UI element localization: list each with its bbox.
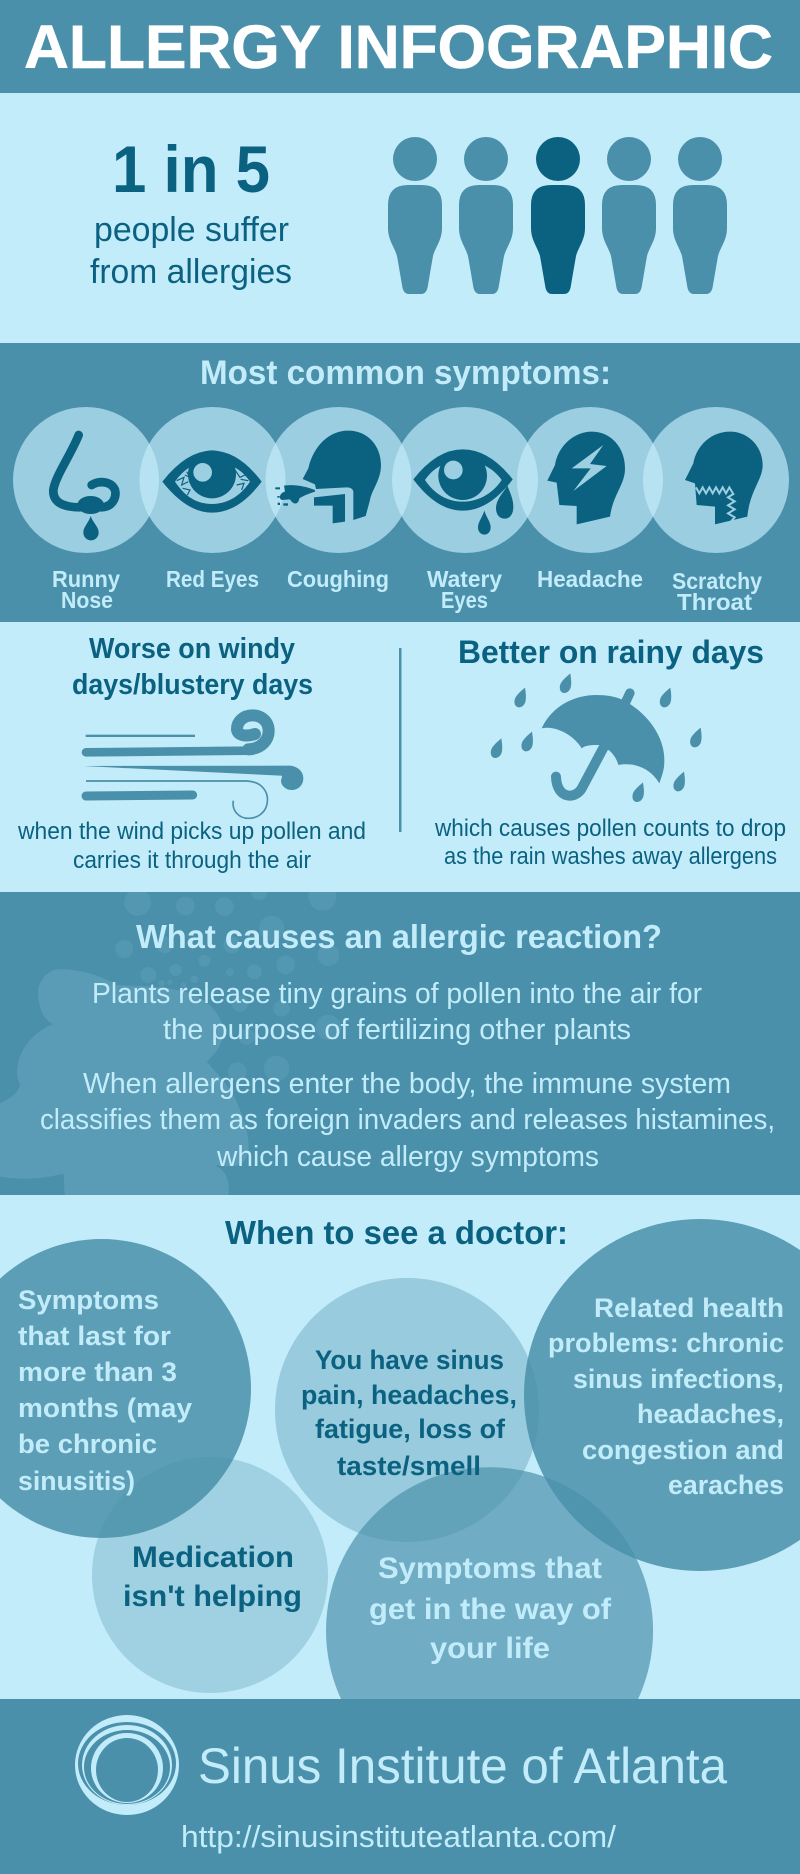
panel: title banner [0, 0, 800, 93]
circle: medication isn't helping: Medication [132, 1541, 294, 1574]
circle: related health problems: sinus infections, [573, 1364, 784, 1394]
text: sinus pain reasons: taste/smell [337, 1451, 481, 1481]
circle: symptoms lasting over 3 months: Symptoms [18, 1285, 159, 1315]
circle: related health problems [524, 1219, 800, 1571]
label: scratchy throat: Throat [677, 589, 752, 615]
icon: coughing head [275, 431, 381, 523]
background: silhouette blowing pollen [0, 883, 341, 1195]
icon: wind [83, 715, 303, 818]
panel: what causes an allergic reaction [0, 883, 800, 1195]
text: sinus pain reasons: pain, headaches, [301, 1380, 517, 1410]
statistic caption: from allergies [90, 253, 292, 291]
circle: medication isn't helping [92, 1457, 328, 1693]
label: headache: Headache [537, 566, 643, 592]
heading: windy days [72, 633, 313, 701]
circle: symptoms in the way of life [326, 1467, 653, 1699]
circle: symptoms in the way of life: Symptoms that [378, 1552, 602, 1585]
label: runny nose: Nose [61, 587, 113, 613]
website url: http://sinusinstituteatlanta.com/ [181, 1819, 616, 1854]
circle: related health problems: problems: chronic [548, 1328, 784, 1358]
statistic caption: people suffer [94, 211, 289, 249]
paragraph: immune response: classifies them as foreign invaders and releases histamines, [40, 1104, 775, 1136]
organisation name: Sinus Institute of Atlanta [198, 1738, 727, 1794]
rainy caption: as the rain washes away allergens [444, 843, 777, 870]
statistic caption [90, 211, 292, 291]
icon: umbrella with rain [491, 673, 702, 802]
windy caption: when the wind picks up pollen and [17, 818, 366, 845]
paragraph: immune response [40, 1068, 775, 1173]
heading: What causes an allergic reaction? [136, 918, 662, 955]
label: runny nose: Runny [52, 566, 120, 592]
heading: windy days: Worse on windy [89, 633, 295, 665]
icon: scratchy throat [685, 432, 763, 524]
paragraph: pollen [92, 978, 702, 1046]
circle: symptoms lasting over 3 months: be chronic [18, 1429, 157, 1459]
panel: 1 in 5 statistic [0, 93, 800, 343]
circle: symptoms in the way of life: your life [430, 1632, 550, 1665]
windy caption [17, 818, 366, 874]
circle: symptoms lasting over 3 months: sinusitis) [18, 1466, 135, 1496]
windy caption: carries it through the air [73, 847, 311, 874]
circle: related health problems: headaches, [637, 1399, 784, 1429]
big statistic: 1 in 5 [112, 132, 270, 206]
icon: watery eye [413, 449, 513, 535]
panel: footer [0, 1699, 800, 1874]
label: watery eyes: Eyes [441, 587, 488, 613]
circle: medication isn't helping: isn't helping [123, 1580, 302, 1613]
circle: symptoms in the way of life: get in the way of [369, 1593, 612, 1626]
heading: windy days: days/blustery days [72, 669, 313, 701]
paragraph: immune response: When allergens enter the body, the immune system [83, 1068, 731, 1100]
heading: rainy days: Better on rainy days [458, 634, 764, 670]
paragraph: pollen: the purpose of fertilizing other plants [163, 1014, 631, 1046]
panel: most common symptoms [0, 343, 800, 622]
paragraph: immune response: which cause allergy symptoms [216, 1141, 599, 1173]
icon: red eye [162, 450, 262, 513]
label: scratchy throat [672, 568, 762, 615]
circle: symptoms lasting over 3 months: months (may [18, 1393, 192, 1423]
icon row: five people, one highlighted [388, 137, 727, 294]
symptom circles [13, 407, 789, 553]
icon: runny nose [53, 435, 115, 540]
circle: related health problems: congestion and [582, 1435, 784, 1465]
circle: sinus pain [275, 1278, 539, 1542]
paragraph: pollen: Plants release tiny grains of pollen into the air for [92, 978, 702, 1010]
rainy caption [434, 815, 786, 870]
text: sinus pain reasons [301, 1345, 517, 1481]
label: runny nose [52, 566, 120, 613]
panel: windy versus rainy days [0, 622, 800, 892]
circle: related health problems: Related health [594, 1293, 784, 1323]
circle: symptoms lasting over 3 months: more than 3 [18, 1357, 177, 1387]
icon: concentric ring logo [75, 1715, 179, 1815]
circle: symptoms lasting over 3 months [0, 1239, 251, 1538]
title: ALLERGY INFOGRAPHIC [24, 13, 773, 81]
label: coughing: Coughing [287, 566, 389, 592]
heading: When to see a doctor: [225, 1214, 568, 1251]
rainy caption: which causes pollen counts to drop [434, 815, 786, 842]
text: sinus pain reasons: fatigue, loss of [315, 1414, 506, 1444]
label: watery eyes [427, 566, 502, 613]
label: red eyes: Red Eyes [166, 566, 259, 592]
icon: headache [547, 432, 625, 524]
circle: related health problems: earaches [668, 1470, 784, 1500]
circle: symptoms lasting over 3 months: that last for [18, 1321, 172, 1351]
text: sinus pain reasons: You have sinus [315, 1345, 504, 1375]
label: watery eyes: Watery [427, 566, 502, 592]
symptoms heading: Most common symptoms: [200, 354, 611, 392]
label: scratchy throat: Scratchy [672, 568, 762, 594]
panel: when to see a doctor [0, 1195, 800, 1699]
